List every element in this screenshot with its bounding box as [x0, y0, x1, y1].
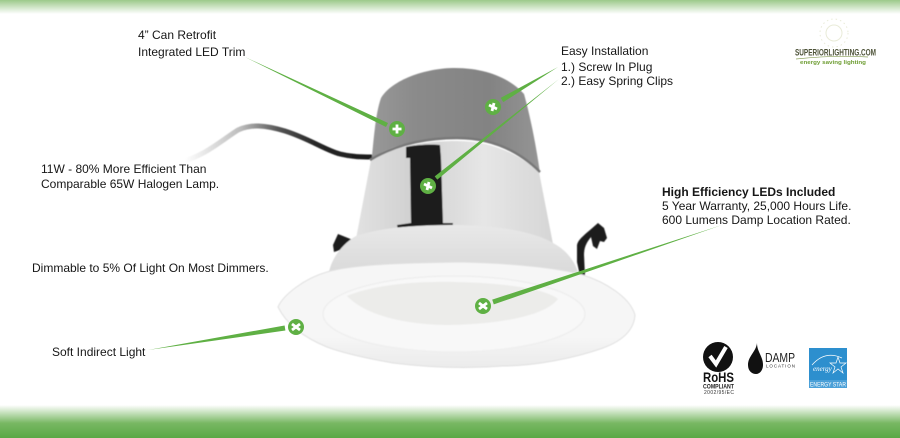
badge: energy star: energy [813, 365, 833, 373]
badge: RoHS compliant [703, 342, 734, 396]
right spring clip [577, 223, 607, 276]
text: efficiency: Comparable 65W Halogen Lamp. [41, 177, 219, 191]
white cone body [355, 141, 553, 244]
pointer line [492, 225, 722, 304]
callout: soft indirect light [52, 319, 304, 359]
badge: energy star: ENERGY STAR [810, 382, 847, 388]
flange shoulder [329, 225, 578, 272]
badge: damp location: LOCATION [766, 364, 795, 368]
logo tagline: energy saving lighting [800, 60, 866, 66]
black mounting clip [397, 145, 453, 230]
callout: can retrofit [138, 28, 405, 137]
marker [389, 121, 405, 137]
callout: high efficiency LEDs: 5 Year Warranty, 25,000 Hours Life. [662, 199, 851, 213]
label: Easy Installation [561, 44, 648, 58]
callout: easy installation [420, 44, 673, 194]
label: High Efficiency LEDs Included [662, 185, 835, 199]
callout: high efficiency LEDs [475, 185, 851, 314]
pointer line [245, 57, 388, 127]
label: Soft Indirect Light [52, 345, 146, 359]
badge: RoHS compliant: COMPLIANT [703, 384, 734, 390]
inner baffle ring [323, 276, 585, 352]
marker [288, 319, 304, 335]
marker: plug [485, 99, 501, 115]
recessed lens [347, 282, 558, 325]
bottom green gradient band [0, 405, 900, 438]
callout: high efficiency LEDs: 600 Lumens Damp Location Rated. [662, 213, 851, 227]
gray can housing [372, 68, 540, 173]
callout: can retrofit: Integrated LED Trim [138, 45, 245, 59]
text: efficiency: 11W - 80% More Efficient Than [41, 162, 206, 176]
pointer line: plug [501, 67, 558, 102]
pointer line: clips [435, 79, 559, 180]
icon: bulb rays [820, 19, 848, 47]
downlight product illustration [180, 68, 635, 367]
label: 4” Can Retrofit [138, 28, 217, 42]
top green gradient band [0, 0, 900, 14]
icon: check circle [703, 342, 733, 372]
marker [475, 298, 491, 314]
badge: damp location [748, 343, 795, 374]
trim ring [278, 262, 635, 367]
logo swoosh [796, 56, 868, 59]
logo: superiorlighting.com [795, 19, 876, 66]
badge: energy star [809, 348, 847, 388]
can seam band [370, 138, 540, 172]
callout: easy installation: 2.) Easy Spring Clips [561, 74, 673, 88]
badge: RoHS compliant: RoHS [703, 369, 734, 385]
text: efficiency [41, 162, 219, 191]
badge: damp location: DAMP [765, 350, 795, 365]
text: dimmable: Dimmable to 5% Of Light On Most Dimmers. [32, 261, 269, 275]
left spring clip [333, 234, 354, 252]
marker: clips [420, 178, 436, 194]
power cord [180, 126, 372, 162]
badge: RoHS compliant: 2002/95/EC [704, 390, 734, 396]
icon: water drop [748, 343, 763, 374]
icon: energy script and star [812, 355, 842, 365]
pointer line [148, 326, 285, 350]
callout: easy installation: 1.) Screw In Plug [561, 60, 652, 74]
